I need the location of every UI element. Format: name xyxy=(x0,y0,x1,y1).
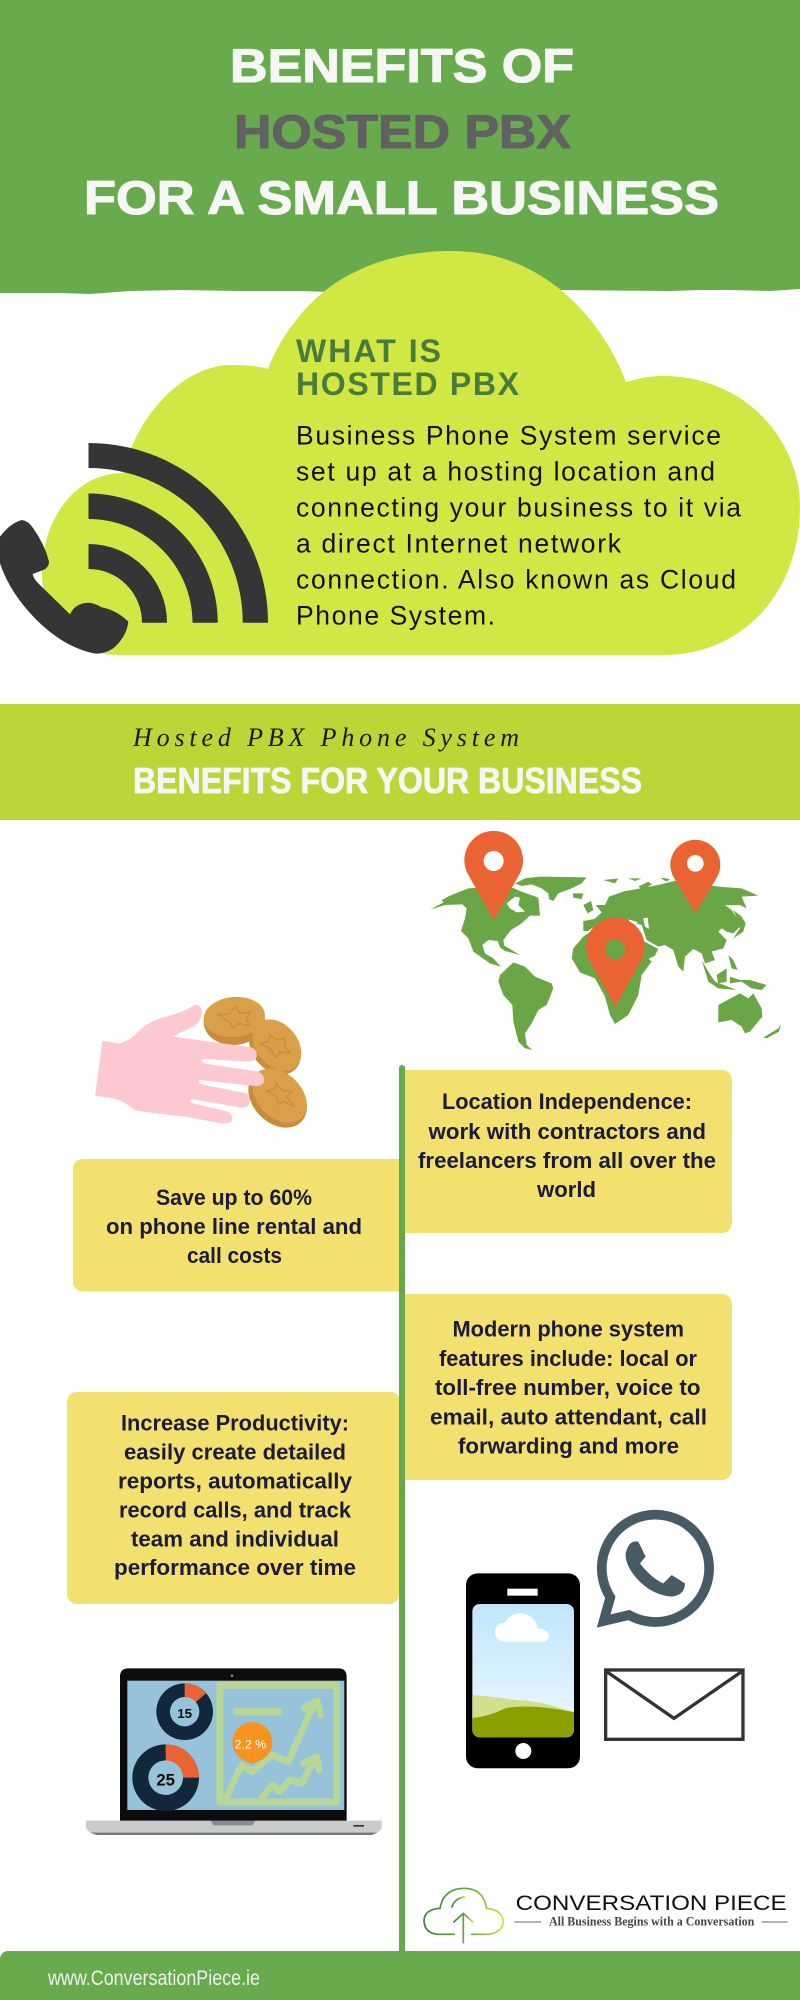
logo: conversation piece: CONVERSATION PIECE xyxy=(516,1890,787,1915)
text block: definition: connecting your business to it via xyxy=(296,492,741,522)
text block: definition: connection. Also known as Cloud xyxy=(296,564,736,594)
icon: laptop with charts xyxy=(86,1668,382,1835)
text block: definition: set up at a hosting location and xyxy=(296,456,715,486)
heading: what is hosted pbx xyxy=(296,333,520,402)
logo icon: cloud with arrow xyxy=(424,1888,503,1943)
chart: small donut xyxy=(156,1683,213,1740)
text block: definition: a direct Internet network xyxy=(296,528,622,558)
timeline divider xyxy=(399,1065,405,1952)
callout: 2.2 percent: 2.2 % xyxy=(235,1737,266,1751)
icon: world map with location pins xyxy=(430,831,781,1050)
chart: small donut: 15 xyxy=(177,1706,193,1721)
title: BENEFITS OF xyxy=(230,39,574,92)
panel: increase productivity: performance over time xyxy=(114,1555,356,1580)
chart: growth lines xyxy=(220,1685,337,1802)
panel: increase productivity: reports, automatically xyxy=(118,1468,353,1494)
panel: modern phone system: toll-free number, voice to xyxy=(435,1375,700,1400)
footer bar: www.ConversationPiece.ie xyxy=(47,1967,260,1990)
panel: increase productivity: Increase Productivity: xyxy=(121,1410,349,1436)
section band xyxy=(0,704,800,820)
header banner xyxy=(0,0,800,294)
title: FOR A SMALL BUSINESS xyxy=(84,171,719,224)
panel: location independence xyxy=(405,1070,732,1233)
panel: location independence: work with contractors and xyxy=(427,1119,706,1144)
panel: modern phone system: features include: local or xyxy=(439,1346,697,1371)
panel: increase productivity xyxy=(67,1392,399,1604)
icon: telephone handset with signal arcs xyxy=(0,443,268,654)
panel: modern phone system: forwarding and more xyxy=(458,1434,679,1458)
heading: what is hosted pbx: WHAT IS xyxy=(296,333,441,369)
panel: what is hosted pbx cloud xyxy=(42,251,800,655)
panel: modern phone system: email, auto attendant, call xyxy=(430,1404,707,1430)
text block: definition xyxy=(296,420,741,630)
panel: save up to 60% xyxy=(73,1159,399,1292)
panel: increase productivity: record calls, and track xyxy=(119,1498,352,1522)
callout: 2.2 percent xyxy=(232,1722,272,1764)
icon: hand with coins xyxy=(95,994,319,1139)
band heading: BENEFITS FOR YOUR BUSINESS xyxy=(133,760,642,801)
panel: modern phone system xyxy=(405,1294,732,1480)
panel: location independence: Location Independence: xyxy=(442,1089,692,1114)
panel: increase productivity: easily create detailed xyxy=(124,1440,346,1464)
icon: whatsapp speech bubble xyxy=(602,1515,709,1622)
logo: conversation piece: All Business Begins with a Conversation xyxy=(549,1914,755,1929)
chart: large donut xyxy=(132,1744,199,1811)
band subtitle: Hosted PBX Phone System xyxy=(132,723,519,752)
text block: definition: Phone System. xyxy=(296,600,495,630)
panel: location independence: freelancers from all over the xyxy=(418,1148,716,1173)
panel: save up to 60%: on phone line rental and xyxy=(106,1214,362,1239)
panel: save up to 60%: Save up to 60% xyxy=(156,1185,312,1210)
panel: modern phone system: Modern phone system xyxy=(452,1316,684,1342)
title: HOSTED PBX xyxy=(234,105,571,158)
footer bar xyxy=(0,1951,800,2000)
chart: large donut: 25 xyxy=(156,1770,175,1789)
heading: what is hosted pbx: HOSTED PBX xyxy=(296,366,520,402)
icon: envelope xyxy=(606,1670,743,1739)
panel: location independence: world xyxy=(536,1177,596,1202)
panel: increase productivity: team and individual xyxy=(131,1526,339,1552)
text block: definition: Business Phone System service xyxy=(296,420,721,450)
icon: smartphone xyxy=(466,1573,580,1768)
title xyxy=(84,39,719,224)
logo: conversation piece xyxy=(424,1888,788,1943)
panel: save up to 60%: call costs xyxy=(187,1243,282,1268)
